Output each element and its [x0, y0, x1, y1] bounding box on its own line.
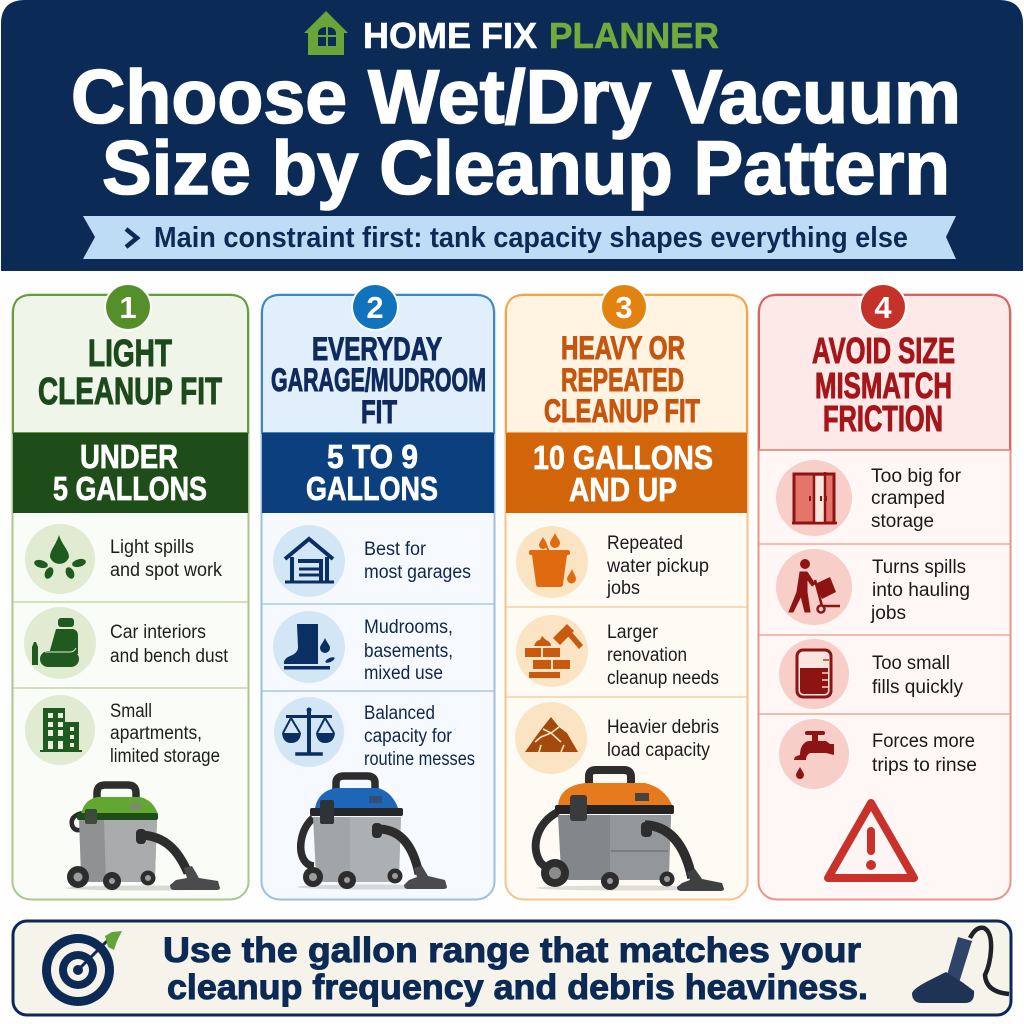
- size band: 5 to 9 gallons: [262, 433, 494, 513]
- text: fills quickly: [872, 677, 963, 698]
- text: water pickup: [606, 556, 709, 577]
- text: [110, 701, 220, 767]
- subtitle ribbon: [83, 216, 956, 259]
- size band: 5 to 9 gallons: GALLONS: [306, 470, 438, 507]
- heading: LIGHT: [88, 333, 172, 375]
- icon: balance scale: [282, 708, 335, 755]
- text: Too small: [872, 653, 950, 674]
- icon: vacuum floor head: [912, 928, 1009, 1003]
- heading: GARAGE/MUDROOM: [271, 362, 486, 398]
- row: more trips: [779, 719, 977, 789]
- text: Forces more: [872, 731, 975, 752]
- size band: under 5 gallons: [13, 433, 248, 513]
- icon: person with hand truck: [789, 559, 840, 612]
- callout: bottom takeaway: [13, 921, 1011, 1015]
- text: limited storage: [110, 746, 220, 767]
- brand name: PLANNER: [549, 15, 719, 56]
- row: heavy debris: [515, 702, 719, 774]
- text: Heavier debris: [607, 717, 719, 738]
- text: mixed use: [364, 663, 443, 684]
- badge 2: 2: [366, 290, 384, 325]
- text: [871, 466, 962, 532]
- heading: FRICTION: [823, 398, 943, 439]
- text: and spot work: [110, 560, 222, 581]
- text: [364, 539, 471, 583]
- icon: chevron: [126, 229, 137, 247]
- text: [607, 622, 719, 689]
- brand name: [363, 15, 719, 56]
- row: water pickup: [516, 526, 709, 599]
- header panel: [1, 0, 1023, 271]
- size band: 5 to 9 gallons: 5 TO 9: [327, 438, 418, 475]
- row: car interiors: [24, 607, 229, 679]
- text: storage: [871, 511, 934, 532]
- icon: warning triangle: [828, 803, 914, 878]
- badge 2: [351, 283, 399, 331]
- row: renovation: [516, 615, 719, 689]
- icon: garage: [285, 539, 334, 582]
- row: light spills: [25, 524, 222, 594]
- text: apartments,: [110, 723, 202, 744]
- badge 1: 1: [119, 290, 137, 325]
- row: balanced capacity: [274, 697, 475, 770]
- icon: rain boot: [284, 624, 335, 670]
- brand name: HOME FIX: [363, 15, 537, 56]
- takeaway text: [163, 931, 868, 1007]
- size band: under 5 gallons: 5 GALLONS: [53, 470, 207, 507]
- text: trips to rinse: [872, 755, 977, 776]
- icon: faucet: [794, 731, 834, 779]
- text: [870, 557, 970, 624]
- text: [606, 533, 709, 599]
- icon: apartment building: [40, 708, 82, 752]
- title: Choose Wet/Dry Vacuum: [71, 55, 961, 140]
- text: [364, 703, 475, 770]
- icon: droplets: [33, 535, 87, 580]
- icon: car seat: [32, 618, 79, 667]
- icon: bricks and hammer: [525, 624, 583, 678]
- heading: CLEANUP FIT: [544, 393, 700, 429]
- row: small apartments: [25, 695, 220, 767]
- row: mudrooms: [273, 611, 453, 684]
- text: most garages: [364, 562, 471, 583]
- text: and bench dust: [110, 646, 229, 667]
- text: basements,: [364, 641, 453, 662]
- text: renovation: [607, 645, 687, 666]
- row: too small: [779, 639, 963, 709]
- heading: [544, 330, 700, 429]
- text: [110, 622, 229, 667]
- heading: FIT: [361, 394, 397, 430]
- panel: everyday garage: [262, 283, 494, 900]
- text: Mudrooms,: [364, 617, 453, 638]
- title: [71, 55, 961, 211]
- badge 3: 3: [615, 290, 633, 325]
- text: [364, 617, 453, 684]
- text: Car interiors: [110, 622, 206, 643]
- text: Turns spills: [872, 557, 966, 578]
- icon: house logo: [304, 11, 348, 55]
- heading: HEAVY OR: [561, 330, 685, 366]
- text: Balanced: [364, 703, 435, 724]
- icon: bucket with drops: [529, 533, 576, 587]
- icon: filling tank: [797, 650, 831, 697]
- heading: REPEATED: [561, 362, 684, 398]
- vacuum: large orange: [536, 770, 724, 891]
- text: into hauling: [872, 580, 970, 601]
- badge 1: [104, 283, 152, 331]
- text: Larger: [607, 622, 659, 643]
- text: Small: [110, 701, 152, 722]
- badge 4: [859, 283, 907, 331]
- text: routine messes: [364, 749, 475, 770]
- size band: 10 gallons and up: AND UP: [569, 471, 677, 508]
- text: cramped: [871, 488, 945, 509]
- text: capacity for: [364, 726, 453, 747]
- panel: avoid mismatch: [758, 283, 1010, 900]
- text: [607, 717, 719, 761]
- text: Light spills: [110, 537, 194, 558]
- text: [110, 537, 222, 581]
- heading: AVOID SIZE: [812, 330, 955, 371]
- subtitle text: Main constraint first: tank capacity shapes everything else: [154, 222, 908, 254]
- badge 3: [600, 283, 648, 331]
- heading: [38, 333, 222, 413]
- heading: EVERYDAY: [312, 331, 442, 367]
- badge 4: 4: [874, 290, 892, 325]
- text: Best for: [364, 539, 427, 560]
- icon: target with arrow: [42, 931, 122, 1006]
- heading: MISMATCH: [815, 365, 952, 406]
- icon: closet: [792, 472, 837, 524]
- text: jobs: [870, 603, 906, 624]
- takeaway text: Use the gallon range that matches your: [163, 931, 861, 970]
- takeaway text: cleanup frequency and debris heaviness.: [167, 968, 868, 1007]
- size band: 10 gallons and up: 10 GALLONS: [533, 439, 713, 476]
- size band: 10 gallons and up: [506, 433, 747, 513]
- panel: heavy cleanup: [506, 283, 748, 900]
- panel: light cleanup: [12, 283, 248, 900]
- row: garages: [273, 525, 471, 597]
- heading: [271, 331, 486, 430]
- heading: [812, 330, 955, 439]
- vacuum: small green: [65, 785, 221, 890]
- vacuum: medium blue: [297, 776, 447, 890]
- text: load capacity: [607, 740, 710, 761]
- text: cleanup needs: [607, 668, 719, 689]
- size band: under 5 gallons: UNDER: [80, 438, 178, 475]
- text: [872, 731, 977, 776]
- text: Too big for: [871, 466, 962, 487]
- row: too big: [776, 460, 962, 536]
- text: [872, 653, 963, 698]
- text: jobs: [606, 578, 640, 599]
- title: Size by Cleanup Pattern: [102, 126, 950, 211]
- heading: CLEANUP FIT: [38, 371, 222, 413]
- row: hauling: [776, 549, 970, 625]
- icon: debris pile: [525, 717, 578, 752]
- text: Repeated: [607, 533, 683, 554]
